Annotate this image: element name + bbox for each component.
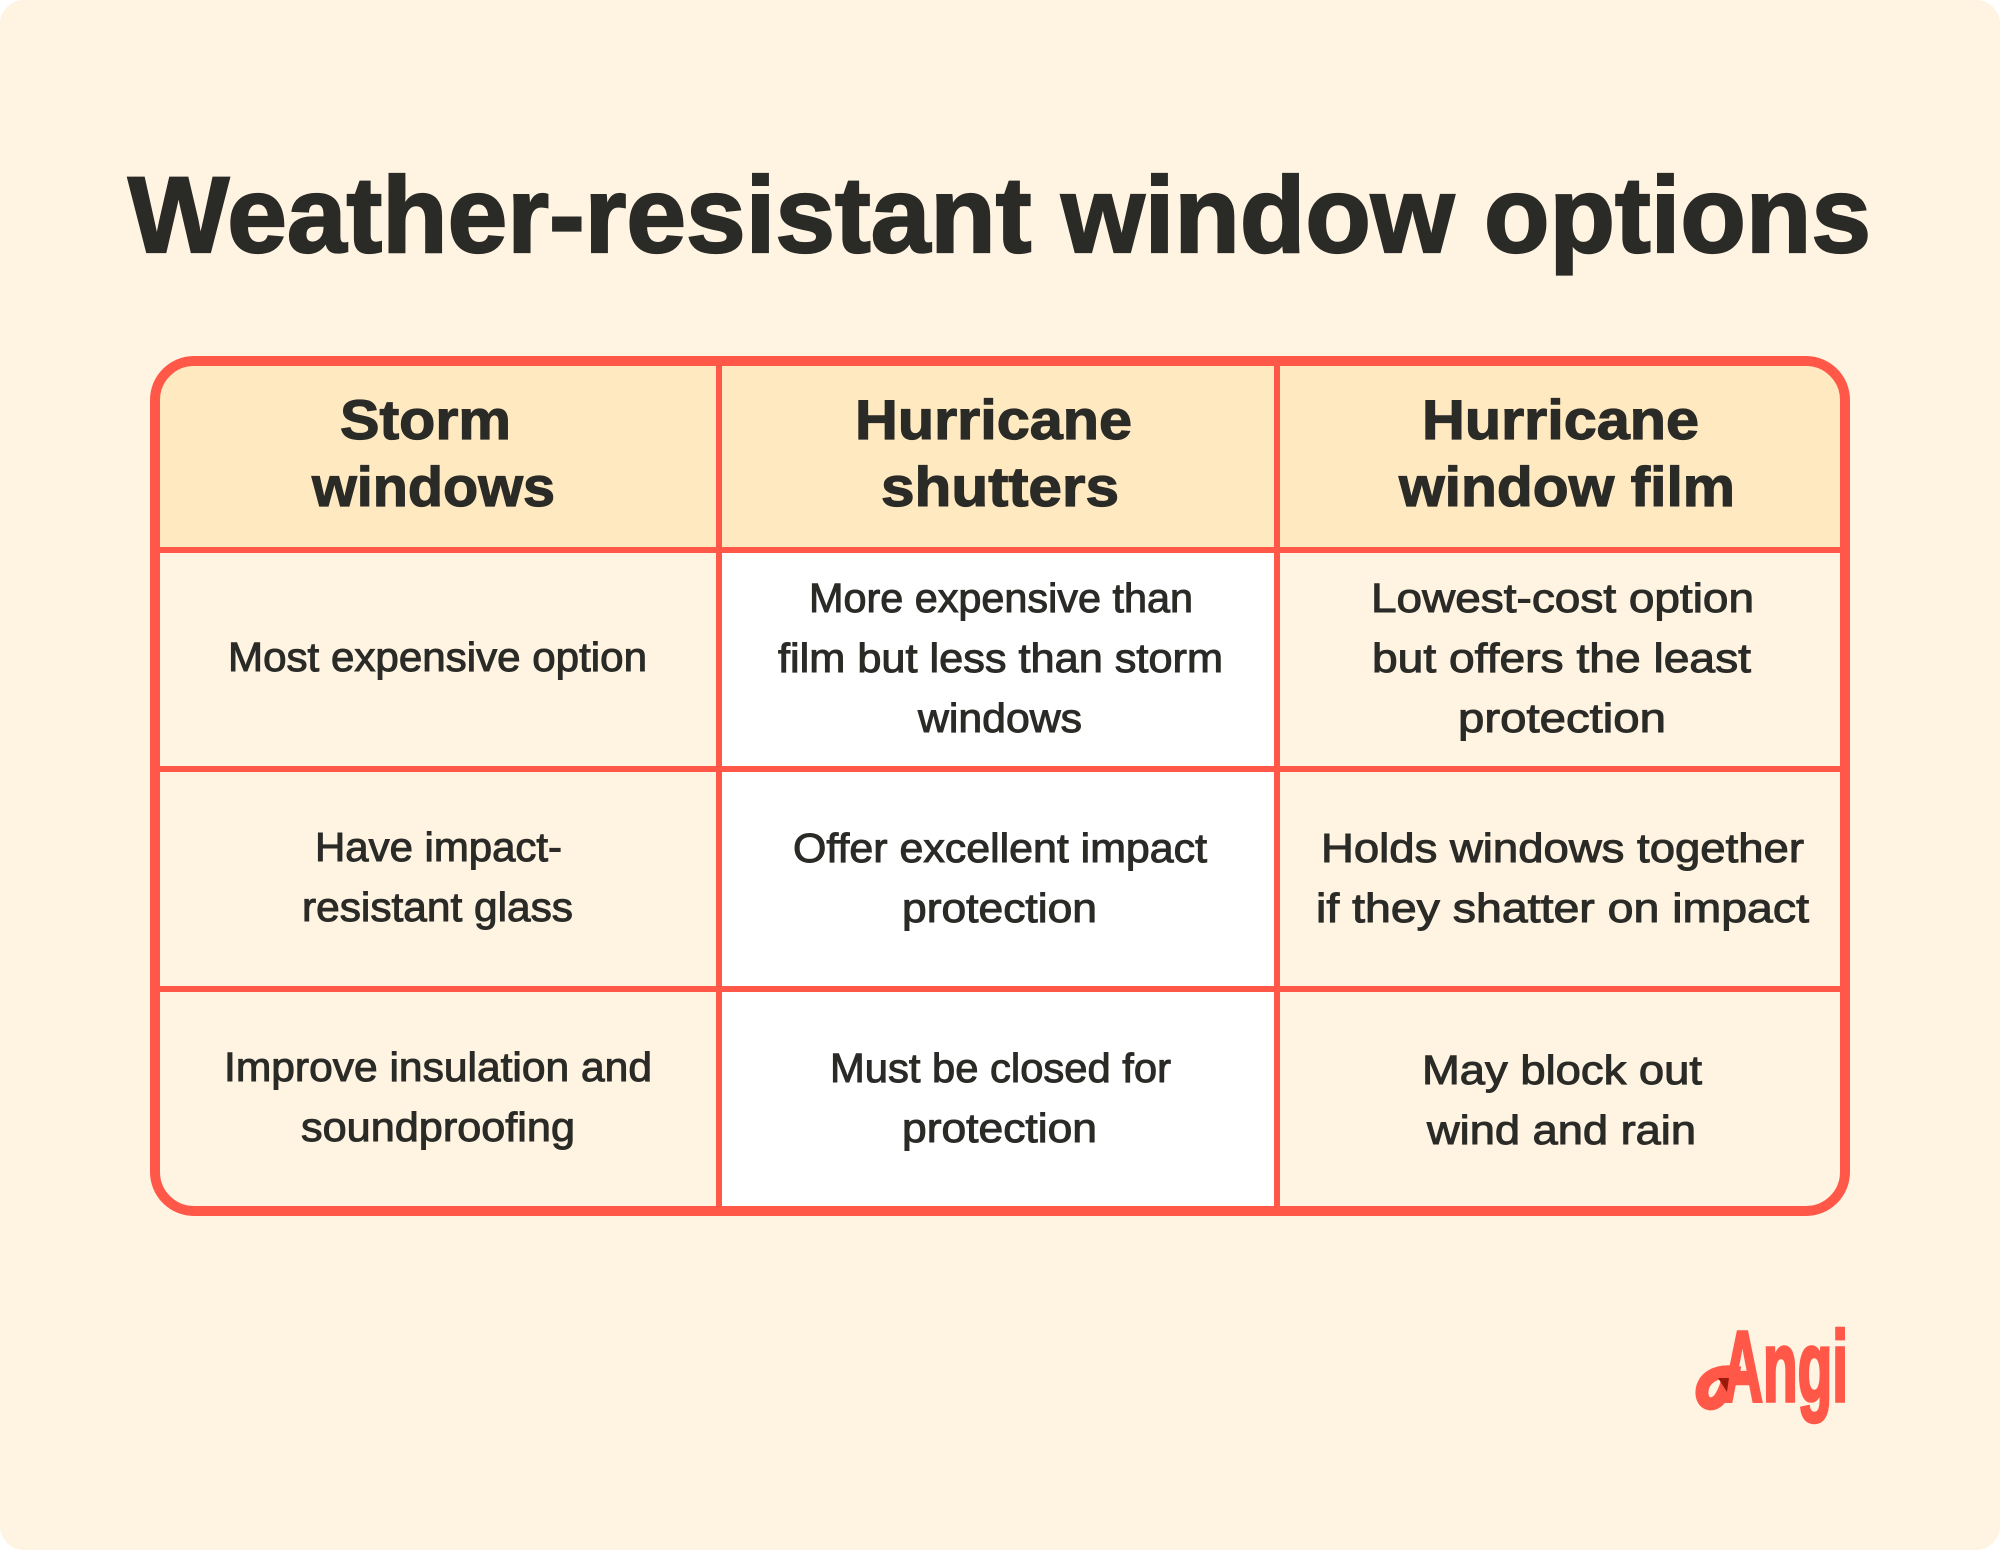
header: hurricane window film: window film (1398, 455, 1735, 518)
cell: insulation: soundproofing (301, 1104, 575, 1150)
cell: impact: Holds windows together (1321, 825, 1804, 871)
cell: weather (1422, 1047, 1703, 1153)
cell: impact: resistant glass (302, 884, 573, 930)
column: hurricane shutters (778, 388, 1223, 1151)
header: hurricane window film (1398, 388, 1735, 518)
cell: cost (778, 575, 1223, 741)
header: hurricane window film: Hurricane (1422, 388, 1699, 451)
cell: cost: More expensive than (809, 575, 1193, 621)
cell: impact: Have impact- (315, 824, 562, 870)
logo: Angi: Angi (1722, 1311, 1848, 1423)
cell: cost: protection (1458, 695, 1666, 741)
cell: impact (1316, 825, 1810, 931)
cell: cost: film but less than storm (778, 635, 1223, 681)
cell: cost: windows (917, 695, 1082, 741)
header: storm windows: Storm (340, 388, 511, 451)
column: hurricane window film (1316, 388, 1810, 1153)
column: storm windows (224, 388, 652, 1150)
cell: cost: but offers the least (1372, 635, 1752, 681)
cell: weather: May block out (1422, 1047, 1703, 1093)
cell: impact: Offer excellent impact (793, 825, 1208, 871)
cell: closure (830, 1045, 1171, 1151)
cell: closure: Must be closed for (830, 1045, 1171, 1091)
cell: impact (793, 825, 1208, 931)
cell: weather: wind and rain (1426, 1107, 1696, 1153)
cell: cost (1371, 575, 1754, 741)
cell: insulation (224, 1044, 652, 1150)
cell: cost: Lowest-cost option (1371, 575, 1754, 621)
header: storm windows (311, 388, 555, 518)
header: hurricane shutters: shutters (881, 455, 1119, 518)
logo: Angi (1702, 1311, 1848, 1423)
cell: cost: Most expensive option (228, 634, 647, 680)
comparison table (150, 356, 1850, 1216)
cell: insulation: Improve insulation and (224, 1044, 652, 1090)
cell: impact: protection (902, 885, 1097, 931)
cell: impact (302, 824, 573, 930)
header: storm windows: windows (311, 455, 555, 518)
cell: impact: if they shatter on impact (1316, 885, 1810, 931)
header: hurricane shutters (855, 388, 1132, 518)
cell: closure: protection (902, 1105, 1097, 1151)
title: Weather-resistant window options (128, 154, 1871, 275)
header: hurricane shutters: Hurricane (855, 388, 1132, 451)
